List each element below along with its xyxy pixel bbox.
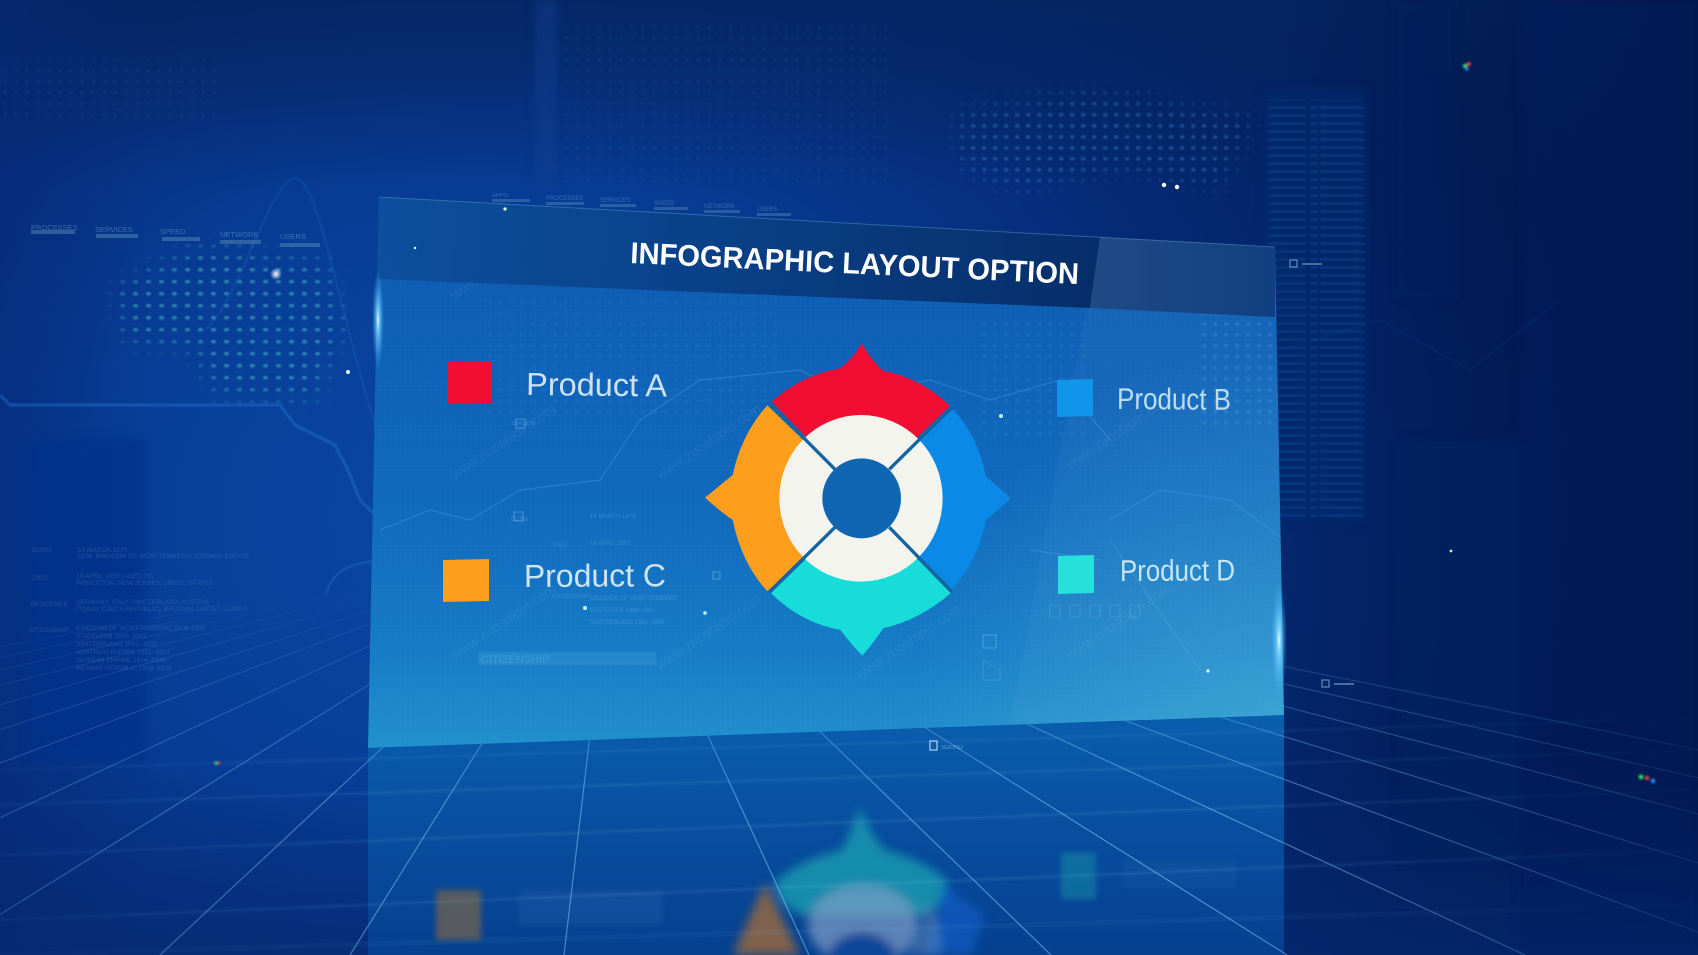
floor grid	[0, 617, 1698, 955]
white ring	[779, 415, 943, 582]
watermarks: www.zuoshipin.com	[447, 400, 559, 483]
watermarks: www.zuoshipin.com	[1062, 580, 1174, 663]
biography data text, left: RESIDENCE	[30, 601, 69, 608]
band of small tab labels, top	[492, 193, 791, 216]
segment: Product D (teal)	[771, 530, 951, 656]
segment: Product B (blue)	[893, 409, 1011, 590]
panel inner table text: SWITZERLAND 1901–1955	[590, 620, 665, 626]
sparkles and stray lights	[214, 62, 1655, 783]
flow diagram boxes	[983, 540, 1200, 680]
side marker right	[1290, 260, 1354, 687]
biography data text, left: KINGDOM OF WÜRTTEMBERG 1879–1896	[76, 624, 206, 632]
watermarks: www.zuoshipin.com	[1062, 220, 1174, 303]
biography data text, left: PRINCETON, NEW JERSEY, UNITED STATES	[76, 580, 214, 587]
watermarks	[451, 282, 1171, 679]
panel inner table text: STATELESS 1896–1901	[590, 608, 656, 614]
banner right facet	[1090, 237, 1275, 317]
panel inner table text: DIED	[553, 543, 568, 549]
watermarks: www.zuoshipin.com	[1062, 390, 1174, 473]
legend: Product B: Product B	[1117, 383, 1231, 417]
panel bright right facet	[1010, 290, 1284, 725]
watermarks: www.zuoshipin.com	[852, 600, 964, 683]
dotted world map, top	[950, 91, 1260, 194]
legend: Product D: Product D	[1120, 554, 1235, 588]
biography data text, left: SWITZERLAND 1901–1955	[76, 641, 157, 648]
band of small tab labels, top: APPS	[492, 193, 508, 199]
panel inner table text: CITIZENSHIP	[552, 594, 589, 600]
panel inner chart lines	[380, 370, 1284, 540]
band of small tab labels, left: SERVICES	[95, 225, 133, 234]
citizenship bar: CITIZENSHIP	[481, 654, 549, 666]
dotted world map, left	[108, 244, 346, 404]
small checkbox markers	[514, 419, 996, 648]
panel reflection on floor	[368, 715, 1284, 955]
biography data text, left: GERMANY, ITALY, SWITZERLAND, AUSTRIA	[76, 599, 210, 606]
biography data text, left: 18 APRIL 1955 (AGED 76)	[76, 573, 153, 580]
legend: Product C	[443, 557, 666, 602]
panel inner table text: BORN	[511, 517, 528, 523]
centre hole	[822, 458, 901, 538]
band of small tab labels, top: PROCESSES	[546, 196, 583, 202]
band of small tab labels, top: SPEED	[654, 201, 675, 207]
panel: title banner	[378, 197, 1275, 317]
small floor marker	[930, 741, 963, 751]
legend: Product D	[1058, 554, 1235, 594]
panel inner table text: KINGDOM OF WÜRTTEMBERG	[590, 595, 678, 602]
band of small tab labels, top: NETWORK	[704, 204, 735, 210]
panel inner table text: 5042836	[512, 421, 536, 427]
segment dividers	[769, 403, 952, 592]
band of small tab labels, left	[31, 223, 320, 247]
band of small tab labels, top: USERS	[757, 207, 778, 213]
small floor marker: SOUND	[941, 745, 963, 751]
biography data text, left: ULM, KINGDOM OF WÜRTTEMBERG, GERMAN EMPIRE	[78, 552, 250, 560]
watermarks: www.zuoshipin.com	[447, 580, 559, 663]
citizenship bar	[478, 652, 656, 666]
band of small tab labels, left: PROCESSES	[31, 223, 78, 232]
title: INFOGRAPHIC LAYOUT OPTION	[630, 237, 1080, 291]
watermarks: www.zuoshipin.com	[447, 220, 559, 303]
biography data text, left: AUSTRIAN EMPIRE 1911–1912	[76, 649, 170, 656]
reflected chart	[733, 807, 985, 955]
panel inner table text: 14 MARCH 1879	[590, 514, 636, 520]
panel inner table text: 18 APRIL 1955	[590, 541, 631, 547]
band of small tab labels, left: USERS	[280, 232, 306, 241]
background line charts	[0, 178, 1560, 595]
biography data text, left: GERMAN EMPIRE 1914–1918	[76, 657, 166, 664]
watermarks: www.zuoshipin.com	[652, 400, 764, 483]
legend: Product A: Product A	[526, 366, 668, 403]
biography data text, left: BORN	[32, 547, 51, 554]
segment: Product C (orange)	[705, 405, 830, 591]
legend: Product B	[1057, 379, 1231, 417]
panel: infographic card	[360, 190, 1300, 750]
panel edge flare, right	[1271, 580, 1287, 700]
legend: Product C: Product C	[524, 557, 666, 594]
watermarks: www.zuoshipin.com	[652, 590, 764, 673]
panel inner table text	[511, 421, 678, 626]
biography data text, left: DIED	[32, 575, 48, 582]
band of small tab labels, left: NETWORK	[220, 230, 258, 239]
watermarks: www.zuoshipin.com	[852, 200, 964, 283]
biography data text, left: 14 MARCH 1879	[78, 547, 128, 554]
panel edge flare, left	[372, 270, 384, 370]
band of small tab labels, top: SERVICES	[600, 198, 630, 204]
band of small tab labels, left: SPEED	[160, 227, 186, 236]
chart: four-segment compass donut	[705, 343, 1011, 656]
legend: Product A	[447, 361, 668, 404]
biography data text, left	[29, 547, 250, 672]
reflected legend swatches and labels	[436, 853, 1237, 940]
biography data text, left: WEIMAR REPUBLIC 1919–1933	[76, 665, 172, 672]
biography data text, left: CITIZENSHIP	[29, 627, 69, 634]
segment: Product A (red)	[772, 343, 950, 470]
biography data text, left: STATELESS 1896–1901	[76, 633, 147, 640]
biography data text, left: (TODAY CZECH REPUBLIC), BELGIUM, UNITED STATES	[76, 606, 248, 613]
watermarks: www.zuoshipin.com	[652, 210, 764, 293]
